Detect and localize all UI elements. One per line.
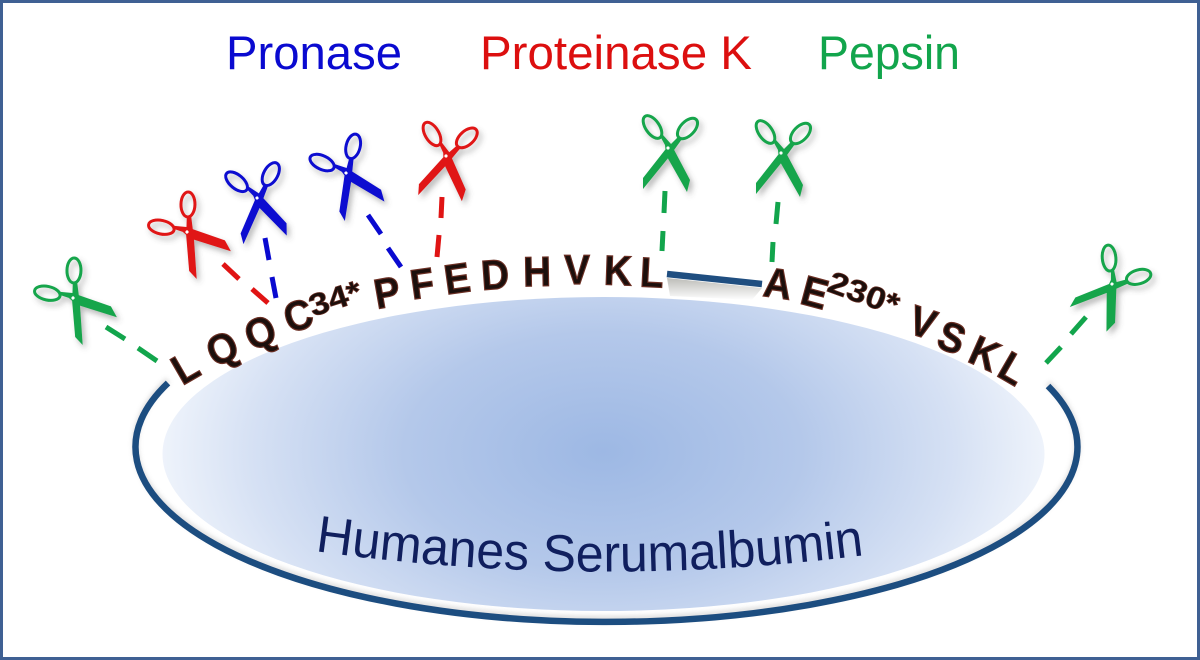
icon: green scissors centre right	[752, 117, 814, 197]
peptide sequence letters: E	[441, 253, 473, 304]
peptide sequence letters: S	[932, 311, 972, 364]
peptide sequence letters: K	[603, 246, 633, 295]
icon: blue scissors right	[304, 126, 397, 225]
peptide sequence letters: H	[523, 247, 551, 296]
peptide sequence letters	[163, 245, 1035, 395]
top outline segment	[667, 274, 762, 284]
peptide sequence letters: L	[639, 248, 665, 297]
icon: green scissors far right	[1065, 239, 1159, 339]
peptide sequence letters: V	[564, 245, 590, 293]
icon: red scissors right	[414, 119, 482, 202]
icon: green scissors centre	[639, 112, 701, 192]
icon: blue scissors left	[220, 155, 300, 248]
label: Humanes Serumalbumin: Humanes Serumalbumin	[319, 516, 862, 572]
shadow under top outline segment	[667, 278, 762, 300]
dashed line: pepsin cut at L	[662, 191, 665, 251]
peptide sequence letters: E	[796, 266, 834, 319]
peptide sequence letters: K	[962, 326, 1007, 381]
peptide sequence letters: D	[479, 250, 511, 299]
peptide sequence letters: 34*	[305, 275, 366, 324]
albumin outline arc	[135, 383, 1077, 622]
peptide sequence letters: L	[991, 342, 1035, 395]
peptide sequence letters: Q	[198, 320, 246, 376]
peptide sequence letters: V	[903, 296, 943, 349]
dashed line: pepsin cut at A	[772, 202, 778, 262]
peptide sequence letters: L	[163, 341, 207, 394]
dashed line: pronase cut at P	[368, 215, 401, 267]
title: Pronase: Pronase	[226, 26, 402, 79]
dashed line: far-right pepsin cut	[1046, 317, 1086, 363]
peptide sequence letters: 230*	[823, 266, 904, 323]
dashed line: pronase cut at Q	[265, 238, 276, 298]
title: Pepsin: Pepsin	[818, 26, 960, 79]
peptide sequence letters: A	[761, 258, 795, 309]
title: Proteinase K: Proteinase K	[480, 26, 752, 79]
albumin ellipse body	[162, 297, 1044, 611]
peptide sequence letters: C	[277, 288, 319, 342]
icon: green scissors far left	[28, 249, 127, 350]
dashed line: proteinase K cut at F	[437, 197, 442, 257]
dashed line: far-left pepsin cut	[106, 327, 157, 361]
peptide sequence letters: F	[407, 258, 437, 309]
peptide sequence letters: P	[370, 267, 404, 318]
label baseline curve	[315, 551, 866, 572]
icon: red scissors left	[142, 183, 241, 284]
dashed line: proteinase K cut at Q	[223, 264, 268, 303]
peptide sequence letters: Q	[237, 305, 283, 360]
